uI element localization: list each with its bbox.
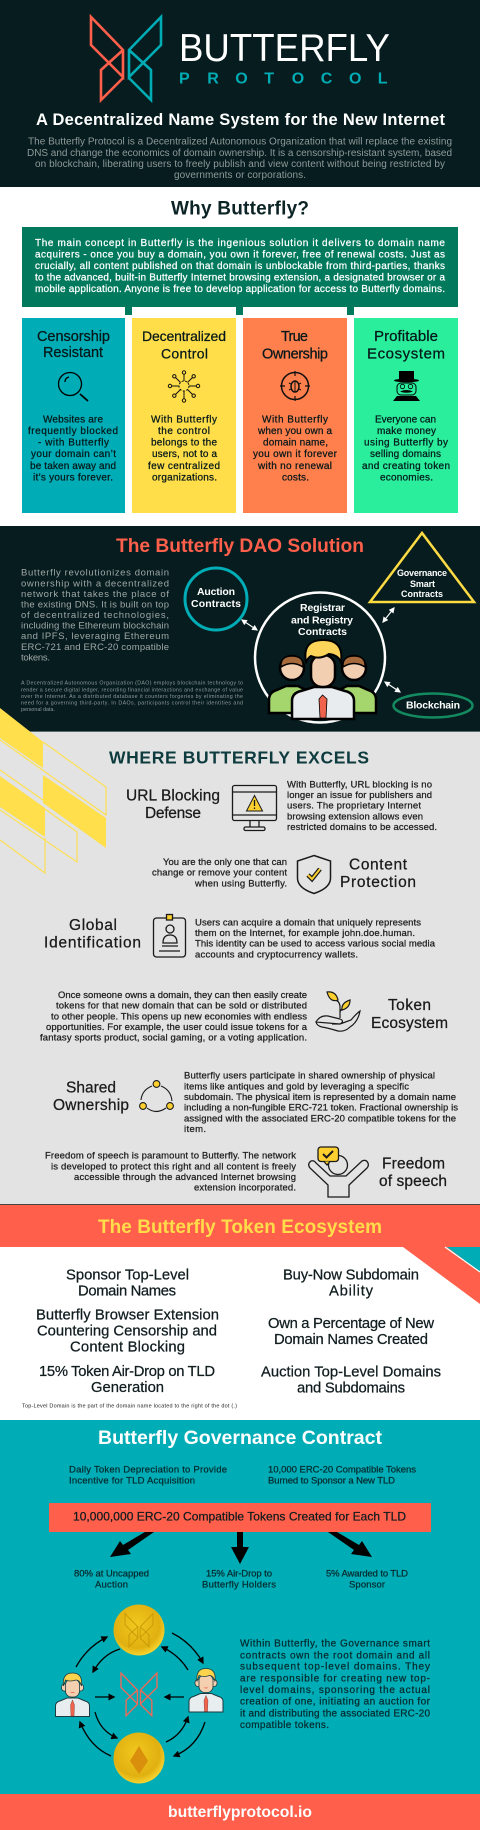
card: profitable ecosystem: make money bbox=[377, 426, 436, 437]
item: content protection: You are the only one that can bbox=[163, 857, 287, 868]
icon: person with speech bubble bbox=[309, 1147, 368, 1197]
DAO description: tokens. bbox=[21, 653, 50, 664]
green intro box: The main concept in Butterfly is the ingenious solution it delivers to domain name bbox=[35, 238, 445, 249]
distribution arrows bbox=[110, 1532, 372, 1564]
DAO footnote: need for a governing third-party. In DAOs, participants control their identities and bbox=[21, 700, 243, 706]
item: freedom of speech: Freedom of speech is paramount to Butterfly. The network bbox=[45, 1151, 296, 1162]
distribution labels: Auction bbox=[95, 1579, 128, 1590]
card: decentralized control: Control bbox=[161, 346, 208, 362]
auction contracts circle: Auction bbox=[197, 586, 235, 598]
green intro box: acquirers - once you buy a domain, you own it forever, free of renewal costs. Just as bbox=[35, 250, 445, 260]
item: URL blocking defense: URL Blocking bbox=[126, 788, 220, 805]
item: shared ownership: Shared bbox=[66, 1080, 116, 1097]
item: shared ownership: items like antiques and gold by leveraging a specific bbox=[184, 1081, 409, 1092]
item: token ecosystem: opportunities. For example, the user could issue tokens for a bbox=[46, 1022, 308, 1033]
right feature list: Buy-Now Subdomain bbox=[283, 1267, 419, 1283]
card: decentralized control bbox=[132, 318, 236, 513]
DAO footnote: A Decentralized Autonomous Organization (DAO) employs blockchain technology to bbox=[21, 681, 243, 687]
panel: why butterfly bbox=[0, 187, 480, 526]
card: censorship resistant: - with Butterfly bbox=[38, 438, 109, 449]
distribution labels: 80% at Uncapped bbox=[74, 1569, 149, 1580]
item: freedom of speech: of speech bbox=[379, 1173, 447, 1190]
left feature list bbox=[36, 1267, 219, 1396]
DAO description: ownership with a decentralized bbox=[21, 578, 169, 589]
item: content protection bbox=[152, 856, 416, 894]
right note: 10,000 ERC-20 Compatible Tokens bbox=[268, 1465, 416, 1476]
left note bbox=[69, 1465, 227, 1486]
card: censorship resistant: be taken away and bbox=[30, 461, 116, 472]
distribution labels: 5% Awarded to TLD bbox=[326, 1569, 408, 1580]
card: profitable ecosystem bbox=[354, 318, 458, 513]
left feature list: 15% Token Air-Drop on TLD bbox=[39, 1364, 215, 1380]
registrar and registry circle: Registrar bbox=[300, 602, 345, 614]
footer URL: butterflyprotocol.io bbox=[168, 1804, 312, 1821]
card: true ownership: with no renewal bbox=[257, 461, 332, 472]
logo wordmark bbox=[179, 27, 390, 88]
right note bbox=[268, 1465, 416, 1486]
item: content protection: Protection bbox=[340, 874, 416, 891]
card: decentralized control: the control bbox=[158, 426, 210, 437]
governance description: level domains, sponsoring the actual bbox=[240, 1685, 430, 1696]
DAO description: network that takes the place of bbox=[21, 589, 169, 600]
distribution labels: 15% Air-Drop to bbox=[206, 1569, 272, 1580]
item: shared ownership: subdomain. The physical item is represented by a domain name bbox=[184, 1092, 456, 1103]
item: global identification: them on the Internet, for example john.doe.human. bbox=[195, 928, 415, 939]
footnote: Top-Level Domain is the part of the domain name located to the right of the dot (.) bbox=[22, 1404, 237, 1410]
item: token ecosystem: tokens for that new domain that can be sold or distributed bbox=[56, 1001, 307, 1012]
right note: Burned to Sponsor a New TLD bbox=[268, 1476, 395, 1486]
left note: Daily Token Depreciation to Provide bbox=[69, 1465, 227, 1476]
governance description bbox=[240, 1639, 431, 1731]
right feature list bbox=[261, 1267, 441, 1397]
panel: footer bbox=[0, 1794, 480, 1830]
card: decentralized control: organizations. bbox=[152, 472, 217, 484]
item: global identification: accounts and cryptocurrency wallets. bbox=[195, 949, 358, 960]
governance description: it and distributing the associated ERC-20 bbox=[240, 1708, 430, 1719]
card: true ownership: With Butterfly bbox=[262, 415, 328, 426]
corner ribbon bbox=[403, 1247, 480, 1304]
DAO description: ERC-721 and ERC-20 compatible bbox=[21, 642, 169, 653]
DAO description: and IPFS, leveraging Ethereum bbox=[21, 631, 169, 642]
card: decentralized control: users, not to a bbox=[152, 449, 217, 460]
icon: magnifier bbox=[58, 372, 88, 401]
item: shared ownership: Butterfly users participate in shared ownership of physical bbox=[184, 1071, 435, 1082]
logo wordmark: PROTOCOL bbox=[179, 70, 388, 88]
right feature list: Auction Top-Level Domains bbox=[261, 1365, 441, 1381]
card: profitable ecosystem: selling domains bbox=[370, 449, 441, 460]
auction contracts circle: Contracts bbox=[191, 598, 241, 610]
item: token ecosystem bbox=[40, 990, 448, 1044]
icon: monitor warning bbox=[232, 786, 276, 830]
item: content protection: Content bbox=[349, 856, 408, 873]
item: freedom of speech bbox=[45, 1147, 447, 1197]
panel: governance contract bbox=[0, 1420, 480, 1794]
coin: butterfly bbox=[114, 1604, 164, 1656]
DAO description: of decentralized technologies, bbox=[21, 610, 169, 621]
intro text bbox=[27, 137, 452, 181]
green intro box bbox=[22, 227, 458, 315]
left feature list: Butterfly Browser Extension bbox=[36, 1307, 219, 1323]
item: freedom of speech: Freedom bbox=[382, 1156, 445, 1173]
green intro box: mobile application. Anyone is free to develop application for access to Butterfly domains. bbox=[35, 284, 445, 295]
logo wordmark: BUTTERFLY bbox=[179, 27, 390, 70]
double arrows bbox=[242, 608, 400, 692]
item: shared ownership bbox=[53, 1071, 458, 1135]
right feature list: Domain Names Created bbox=[274, 1332, 428, 1348]
blockchain ellipse: Blockchain bbox=[406, 700, 460, 712]
green intro box: crucially, all content published on that domain is unblockable from third-parties, thanks bbox=[35, 261, 445, 272]
red token bar bbox=[49, 1503, 431, 1532]
DAO description bbox=[21, 568, 169, 664]
card: decentralized control: Decentralized bbox=[142, 328, 226, 344]
left feature list: Generation bbox=[91, 1380, 164, 1396]
item: global identification bbox=[44, 914, 436, 960]
card: censorship resistant: your domain can’t bbox=[31, 449, 116, 460]
card: censorship resistant: frequently blocked bbox=[28, 426, 118, 437]
item: URL blocking defense: longer an issue for publishers and bbox=[287, 790, 432, 801]
left feature list: Countering Censorship and bbox=[37, 1324, 217, 1340]
panel: token ecosystem bbox=[0, 1204, 480, 1420]
heading: why butterfly: Why Butterfly? bbox=[171, 199, 309, 220]
card: censorship resistant: Censorship bbox=[37, 329, 110, 345]
icon: team of people bbox=[269, 640, 376, 719]
distribution labels: Sponsor bbox=[349, 1579, 385, 1590]
card: decentralized control: belongs to the bbox=[151, 438, 217, 449]
right feature list: Ability bbox=[329, 1283, 374, 1299]
item: URL blocking defense: Defense bbox=[145, 805, 201, 822]
governance triangle: Contracts bbox=[401, 589, 443, 599]
panel: DAO solution bbox=[0, 526, 480, 731]
governance description: contracts own the root domain and all bbox=[240, 1650, 430, 1661]
card: censorship resistant: it’s yours forever. bbox=[33, 472, 113, 484]
item: freedom of speech: accessible through the advanced Internet browsing bbox=[74, 1172, 296, 1183]
right feature list: and Subdomains bbox=[297, 1381, 405, 1397]
item: content protection: when using Butterfly. bbox=[194, 878, 287, 889]
heading: tagline: A Decentralized Name System for the New Internet bbox=[36, 111, 446, 129]
DAO description: including the Ethereum blockchain bbox=[21, 621, 169, 632]
green intro box: to the advanced, built-in Butterfly Internet browsing extension, a designated browser or a bbox=[35, 272, 445, 284]
governance triangle: Smart bbox=[410, 579, 435, 589]
coin: ethereum bbox=[114, 1732, 164, 1784]
left feature list: Sponsor Top-Level bbox=[66, 1267, 189, 1283]
card: true ownership: you own it forever bbox=[253, 449, 338, 460]
item: shared ownership: including a non-fungible ERC-721 token. Fractional ownership is bbox=[184, 1103, 458, 1114]
diagram: governance cycle bbox=[56, 1604, 223, 1784]
icon: network bbox=[168, 371, 200, 402]
item: token ecosystem: Token bbox=[388, 997, 431, 1014]
intro text: The Butterfly Protocol is a Decentralized Autonomous Organization that will replace the existing bbox=[28, 137, 452, 148]
icon: ID badge bbox=[154, 914, 186, 957]
item: URL blocking defense: With Butterfly, URL blocking is no bbox=[287, 779, 432, 790]
distribution labels bbox=[74, 1569, 408, 1590]
card: profitable ecosystem: Ecosystem bbox=[367, 346, 445, 363]
icon: butterfly logo bbox=[91, 17, 161, 100]
card: true ownership: when you own a bbox=[257, 426, 332, 437]
right feature list: Own a Percentage of New bbox=[268, 1316, 434, 1332]
panel: header bbox=[0, 0, 480, 187]
governance description: compatible tokens. bbox=[240, 1720, 329, 1731]
item: URL blocking defense: restricted domains to be accessed. bbox=[287, 822, 437, 833]
intro text: on blockchain, liberating users to freely publish and view content without being restricted by bbox=[35, 159, 445, 170]
registrar and registry circle: Contracts bbox=[298, 626, 347, 638]
item: shared ownership: Ownership bbox=[53, 1097, 129, 1114]
item: token ecosystem: fantasy sports product, social gaming, or a voting application. bbox=[40, 1033, 307, 1044]
DAO footnote: render a secure digital ledger, recording financial interactions and exchange of value bbox=[21, 687, 243, 693]
card: profitable ecosystem: and creating token bbox=[362, 461, 450, 472]
card: true ownership: Ownership bbox=[262, 347, 328, 363]
item: freedom of speech: extension incorporated. bbox=[194, 1183, 296, 1194]
DAO footnote bbox=[21, 681, 243, 713]
item: global identification: Users can acquire a domain that uniquely represents bbox=[195, 917, 421, 928]
auction contracts circle bbox=[185, 568, 247, 630]
card: decentralized control: With Butterfly bbox=[151, 415, 217, 426]
person: left bbox=[56, 1673, 90, 1716]
card: profitable ecosystem: Profitable bbox=[374, 328, 438, 345]
left feature list: Domain Names bbox=[78, 1283, 176, 1299]
item: global identification: This identity can be used to access various social media bbox=[195, 939, 436, 950]
card: true ownership: True bbox=[281, 329, 308, 345]
item: URL blocking defense: users. The proprietary Internet bbox=[287, 801, 421, 812]
item: freedom of speech: is developed to protect this right and all content is freely bbox=[51, 1161, 296, 1172]
item: content protection: change or remove your content bbox=[152, 868, 287, 879]
card: censorship resistant: Websites are bbox=[43, 415, 103, 426]
governance description: subsequent top-level domains. They bbox=[240, 1662, 430, 1673]
icon: shield bbox=[298, 856, 330, 894]
card: profitable ecosystem: using Butterfly by bbox=[364, 438, 448, 449]
card: censorship resistant bbox=[22, 318, 125, 513]
card: profitable ecosystem: Everyone can bbox=[375, 415, 436, 426]
red token bar: 10,000,000 ERC-20 Compatible Tokens Created for Each TLD bbox=[73, 1510, 406, 1524]
registrar and registry circle bbox=[255, 592, 385, 722]
icon: shared cycle bbox=[140, 1081, 173, 1112]
left note: Incentive for TLD Acquisition bbox=[69, 1476, 195, 1486]
governance triangle bbox=[370, 533, 474, 602]
intro text: DNS and change the economics of domain ownership. It is a censorship-resistant system, based bbox=[27, 148, 452, 159]
cycle arrows bbox=[76, 1633, 205, 1756]
DAO footnote: personal data. bbox=[21, 707, 55, 713]
heading: where butterfly excels: WHERE BUTTERFLY EXCELS bbox=[109, 748, 369, 768]
distribution labels: Butterfly Holders bbox=[202, 1579, 276, 1590]
icon: small butterfly logo bbox=[121, 1673, 157, 1716]
item: global identification: Global bbox=[69, 917, 117, 934]
card: true ownership: domain name, bbox=[263, 438, 328, 449]
item: shared ownership: assigned with the associated ERC-20 compatible tokens for the bbox=[184, 1113, 456, 1124]
item: URL blocking defense: browsing extension allows even bbox=[287, 811, 423, 822]
item: URL blocking defense bbox=[126, 779, 437, 833]
item: token ecosystem: Once someone owns a domain, they can then easily create bbox=[58, 990, 307, 1001]
card: true ownership bbox=[243, 318, 347, 513]
item: shared ownership: item. bbox=[184, 1124, 206, 1135]
governance triangle: Governance bbox=[397, 568, 447, 578]
registrar and registry circle: and Registry bbox=[291, 615, 353, 627]
governance description: are responsible for creating new top- bbox=[240, 1674, 430, 1684]
heading: token ecosystem: The Butterfly Token Ecosystem bbox=[98, 1217, 382, 1238]
blockchain ellipse bbox=[394, 694, 472, 718]
icon: target bug bbox=[280, 371, 310, 401]
yellow stripes bbox=[0, 708, 106, 873]
heading: DAO solution: The Butterfly DAO Solution bbox=[116, 536, 364, 557]
left feature list: Content Blocking bbox=[70, 1340, 185, 1356]
icon: plant in hand bbox=[316, 992, 360, 1031]
heading: governance contract: Butterfly Governance Contract bbox=[98, 1427, 382, 1449]
item: global identification: Identification bbox=[44, 935, 141, 952]
DAO description: the existing DNS. It is built on top bbox=[21, 600, 169, 610]
person: right bbox=[189, 1668, 223, 1712]
panel: where butterfly excels bbox=[0, 708, 480, 1204]
card: profitable ecosystem: economies. bbox=[380, 472, 433, 484]
card: true ownership: costs. bbox=[282, 472, 309, 484]
item: token ecosystem: to other people. This opens up new economies with endless bbox=[51, 1011, 307, 1022]
intro text: governments or corporations. bbox=[174, 170, 306, 181]
item: token ecosystem: Ecosystem bbox=[371, 1015, 448, 1032]
DAO footnote: over the Internet. As a distributed database it counters forgeries by eliminating the bbox=[21, 694, 243, 700]
DAO description: Butterfly revolutionizes domain bbox=[21, 568, 169, 579]
governance description: creation of one, initiating an auction for bbox=[240, 1697, 431, 1708]
card: decentralized control: few centralized bbox=[148, 461, 220, 472]
icon: top hat investor bbox=[393, 371, 420, 401]
card: censorship resistant: Resistant bbox=[43, 345, 103, 361]
governance description: Within Butterfly, the Governance smart bbox=[240, 1639, 430, 1650]
